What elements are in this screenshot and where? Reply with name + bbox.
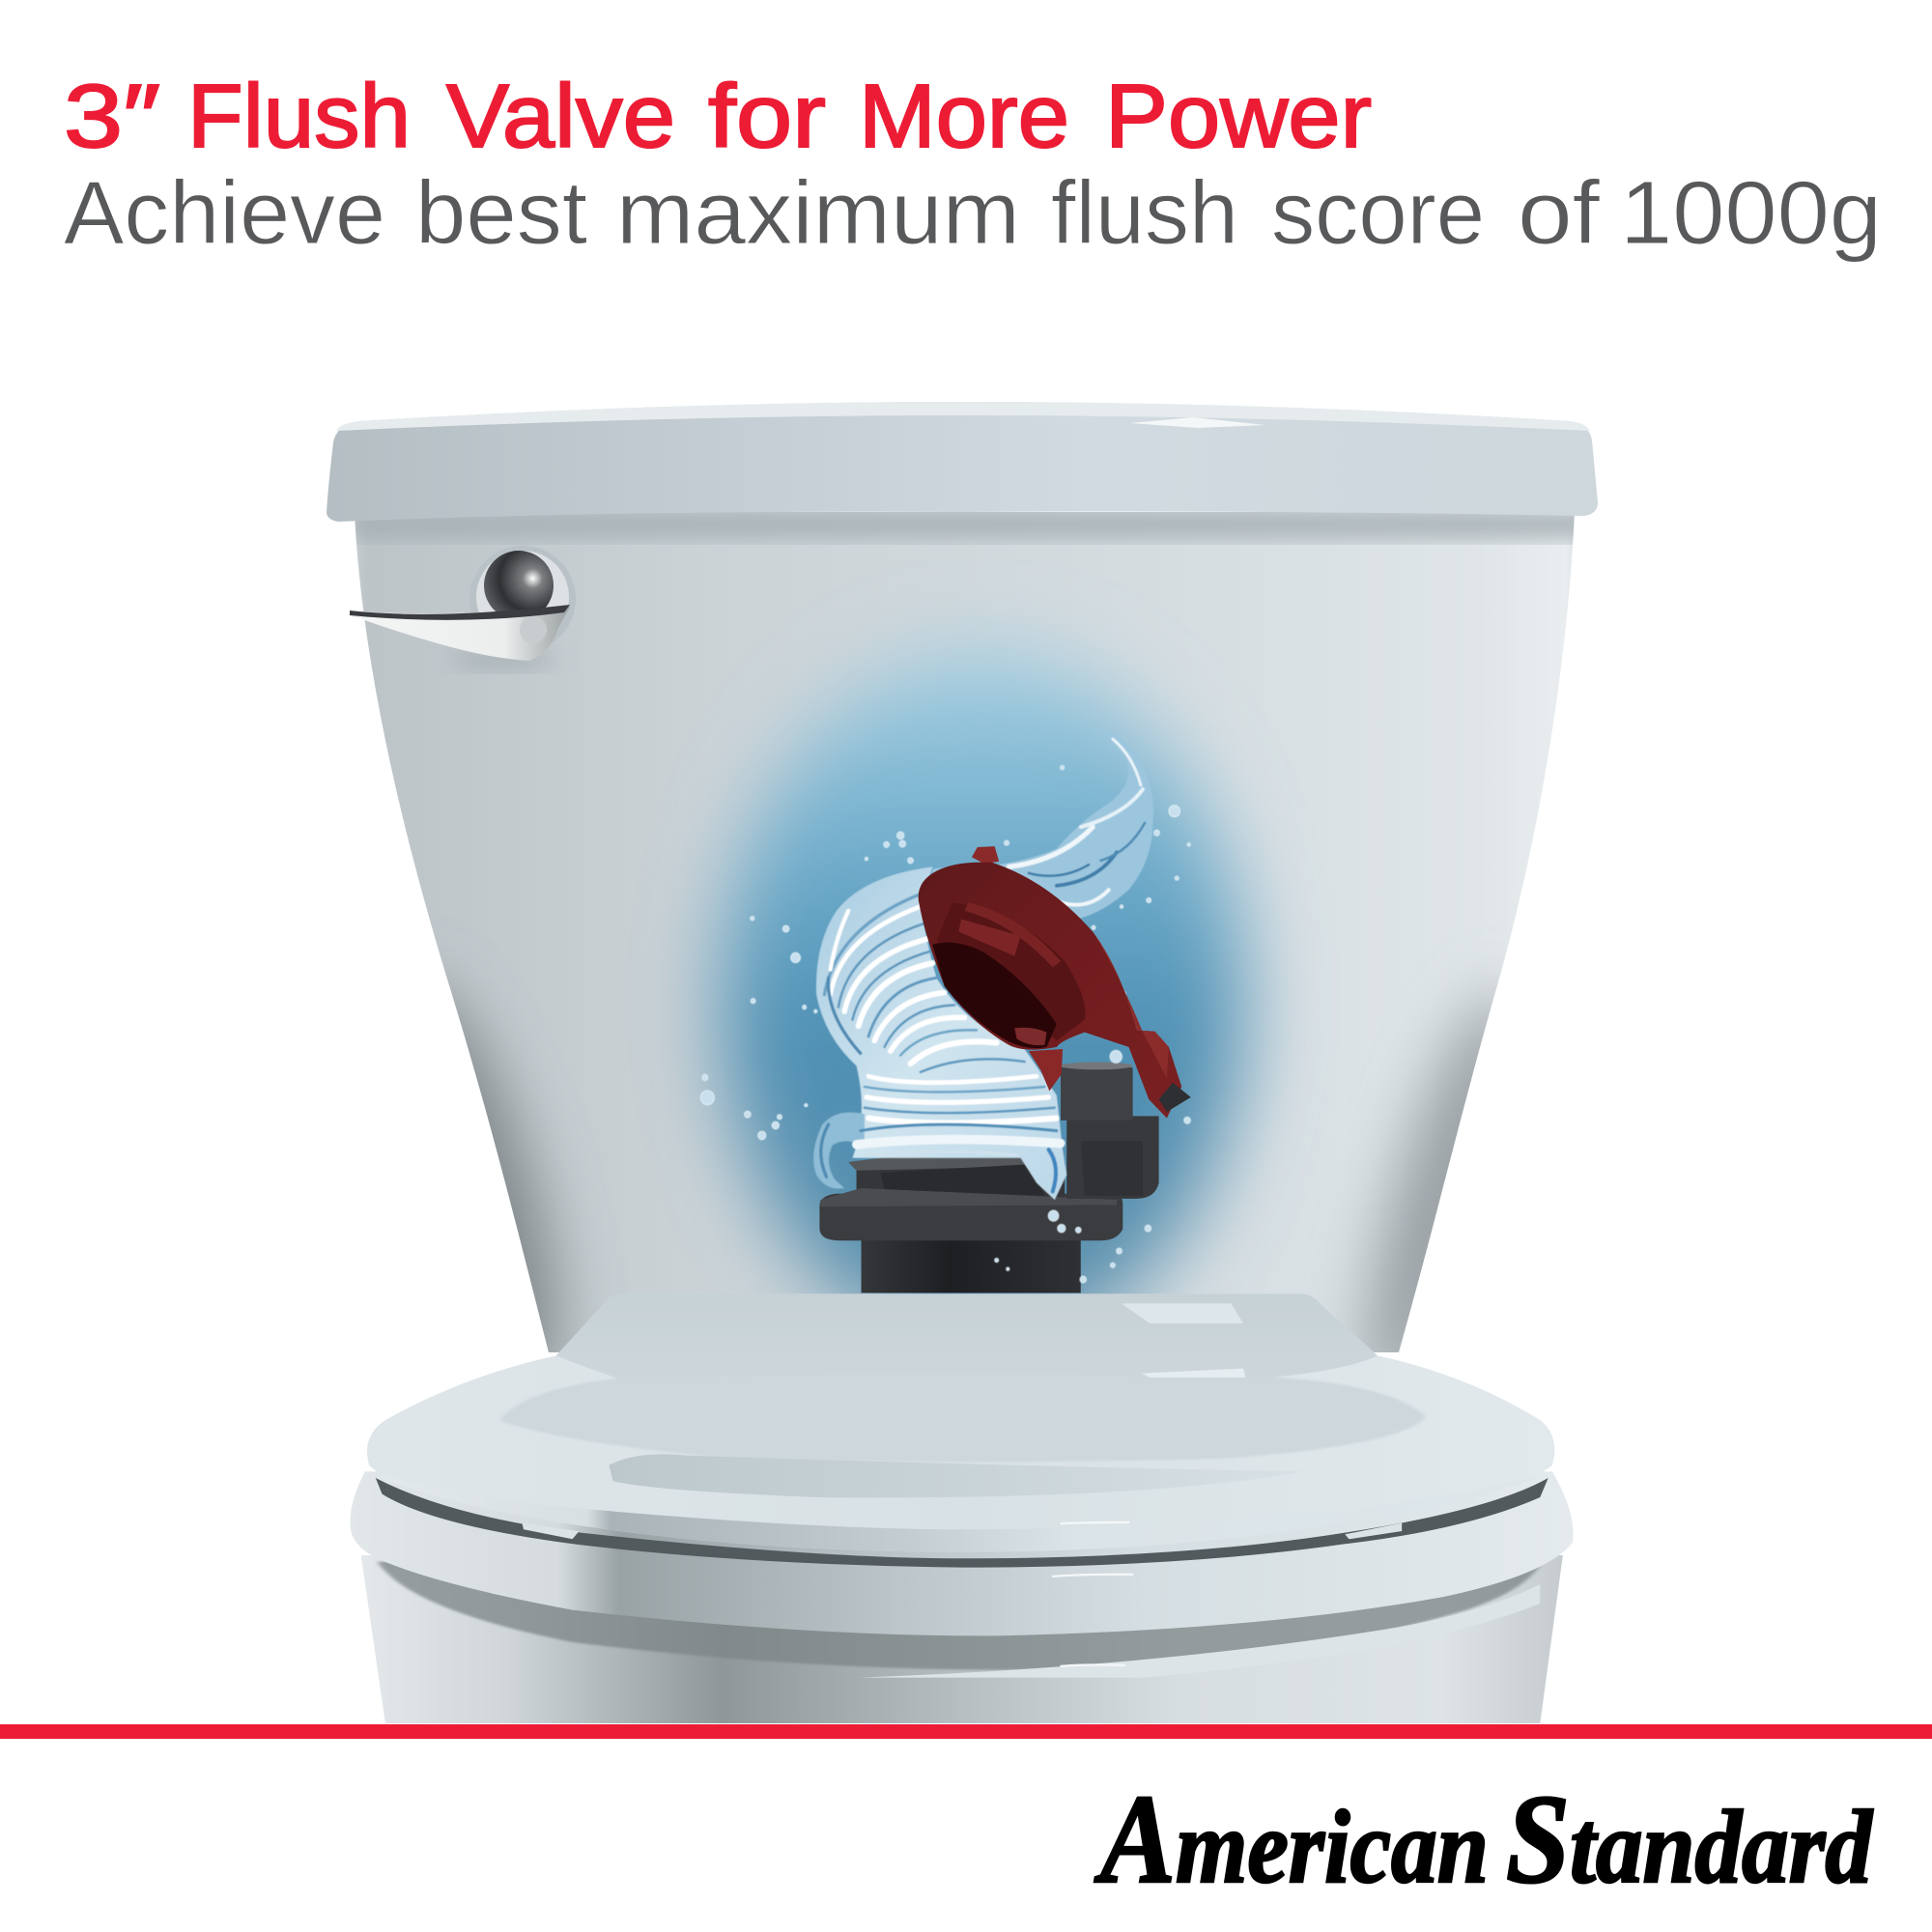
subtitle: 1000g — [1620, 162, 1882, 263]
title: Power — [1105, 66, 1372, 166]
flapper disc — [919, 863, 1181, 1119]
overflow tube — [1061, 1062, 1159, 1199]
water base curl — [813, 1112, 865, 1189]
title: More — [859, 66, 1069, 166]
water tail — [932, 728, 1153, 920]
lid bowl recess — [499, 1370, 1426, 1462]
valve upper body — [820, 1153, 1117, 1207]
flush lever — [350, 546, 576, 668]
flapper tab — [972, 846, 999, 864]
flapper lower tab — [1029, 1049, 1063, 1091]
valve flange — [819, 1194, 1122, 1240]
title — [64, 66, 1372, 166]
bowl shadow — [378, 1562, 1540, 1670]
subtitle: Achieve — [64, 162, 385, 263]
lid front edge — [378, 1475, 1544, 1552]
seat gap — [376, 1478, 1548, 1568]
water droplets — [700, 765, 1190, 1283]
toilet bowl and seat — [351, 1293, 1574, 1723]
water body — [816, 867, 1066, 1200]
water strands — [821, 739, 1145, 1191]
tank body — [355, 512, 1575, 1352]
subtitle: maximum — [616, 162, 1020, 263]
subtitle: flush — [1051, 162, 1238, 263]
subtitle: score — [1271, 162, 1485, 263]
tank lid — [327, 402, 1598, 522]
hinge tab — [556, 1293, 1378, 1379]
subtitle: best — [415, 162, 587, 263]
American Standard logo — [1094, 1768, 1874, 1910]
American Standard logo: American — [1094, 1768, 1489, 1910]
seat lid — [367, 1293, 1554, 1552]
valve pipe — [862, 1237, 1081, 1293]
title: Flush — [187, 66, 411, 166]
lid reflection — [609, 1454, 1304, 1497]
bowl — [361, 1555, 1563, 1723]
subtitle — [64, 162, 1882, 263]
flapper — [919, 846, 1191, 1119]
seat bumpers — [522, 1523, 1402, 1539]
water swirl — [700, 728, 1190, 1283]
blue glow — [722, 652, 1243, 1348]
title: for — [708, 66, 826, 166]
seat ring — [351, 1471, 1574, 1635]
subtitle: of — [1518, 162, 1600, 263]
American Standard logo: Standard — [1506, 1768, 1874, 1910]
flapper cup — [932, 943, 1057, 1048]
flush valve and water splash — [700, 728, 1191, 1293]
title: 3″ — [64, 66, 160, 166]
flapper hinge — [1159, 1083, 1191, 1112]
red divider band — [0, 1724, 1932, 1739]
title: Valve — [446, 66, 675, 166]
flapper ribs — [936, 902, 1085, 1040]
toilet tank — [327, 402, 1604, 1415]
